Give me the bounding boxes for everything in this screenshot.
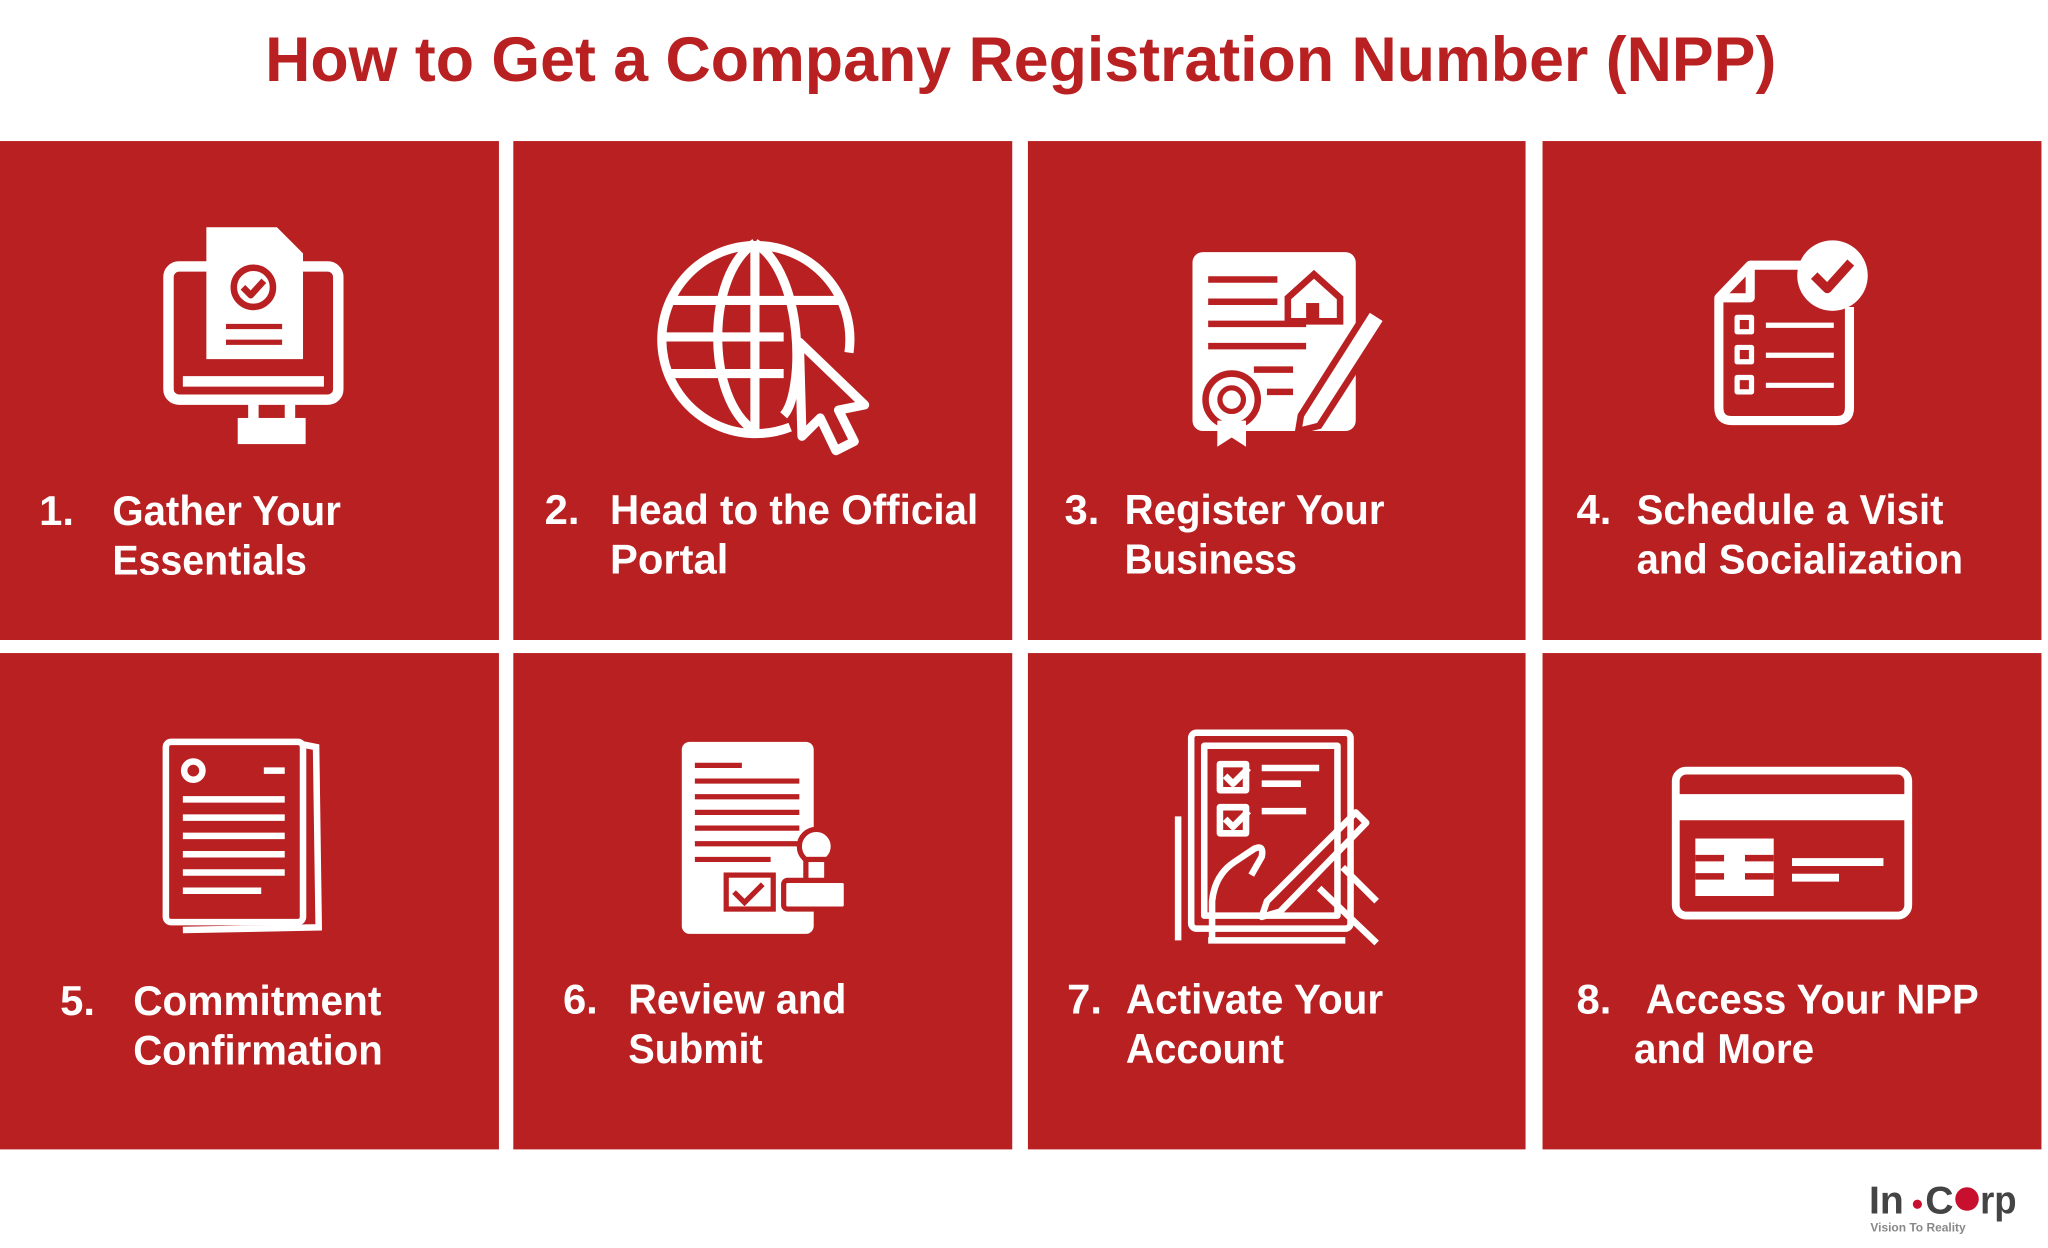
label: 8.: [1576, 976, 1611, 1023]
label: Confirmation: [133, 1026, 383, 1073]
label: 5.: [60, 977, 95, 1024]
panel: step 2: [513, 141, 1012, 640]
panel: step 3: [1028, 141, 1526, 640]
icon: document with stamp: [682, 742, 846, 934]
label: 4.: [1576, 486, 1611, 533]
label: Commitment: [133, 977, 381, 1024]
label: Head to the Official: [610, 486, 978, 533]
panel: step 7: [1028, 653, 1526, 1149]
panel: step 4: [1543, 141, 2041, 640]
label: Activate Your: [1126, 976, 1383, 1023]
label: Register Your: [1125, 486, 1384, 533]
label: Schedule a Visit: [1637, 486, 1944, 533]
label: Essentials: [112, 537, 307, 584]
label: 2.: [545, 486, 580, 533]
label: Account: [1126, 1025, 1284, 1072]
icon: registration document: [1192, 252, 1387, 447]
panel: step 8: [1543, 653, 2041, 1149]
label: Access Your NPP: [1646, 976, 1979, 1023]
label: Review and: [628, 976, 846, 1023]
label: [1067, 976, 1383, 1072]
label: [563, 976, 846, 1072]
icon: ID card: [1676, 771, 1908, 916]
logo: InCorp: rp: [1980, 1179, 2017, 1222]
label: [1064, 486, 1384, 582]
logo: InCorp: Vision To Reality: [1870, 1222, 1966, 1235]
label: 3.: [1064, 486, 1099, 533]
label: Gather Your: [112, 487, 341, 534]
label: [545, 486, 978, 582]
title: How to Get a Company Registration Number (NPP): [265, 25, 1776, 95]
label: 1.: [39, 487, 74, 534]
label: Portal: [610, 535, 728, 582]
icon: stacked documents: [166, 742, 319, 930]
panel: step 5: [0, 653, 499, 1149]
label: and Socialization: [1637, 535, 1963, 582]
label: [60, 977, 383, 1073]
label: 6.: [563, 976, 598, 1023]
label: 7.: [1067, 976, 1102, 1023]
label: [1576, 976, 1979, 1072]
logo: InCorp: C: [1925, 1179, 1954, 1222]
label: Submit: [628, 1025, 763, 1072]
label: and More: [1634, 1025, 1814, 1072]
icon: monitor with document: [168, 227, 338, 444]
icon: checklist clipboard: [1719, 240, 1868, 421]
label: [1576, 486, 1963, 582]
label: [39, 487, 341, 584]
panel: step 6: [513, 653, 1012, 1149]
icon: globe with cursor: [662, 243, 865, 451]
panel: step 1: [0, 141, 499, 640]
logo: InCorp: In: [1869, 1179, 1904, 1222]
label: Business: [1125, 535, 1297, 582]
logo: InCorp: [1869, 1179, 2017, 1235]
icon: clipboard with hand and pen: [1178, 733, 1377, 943]
